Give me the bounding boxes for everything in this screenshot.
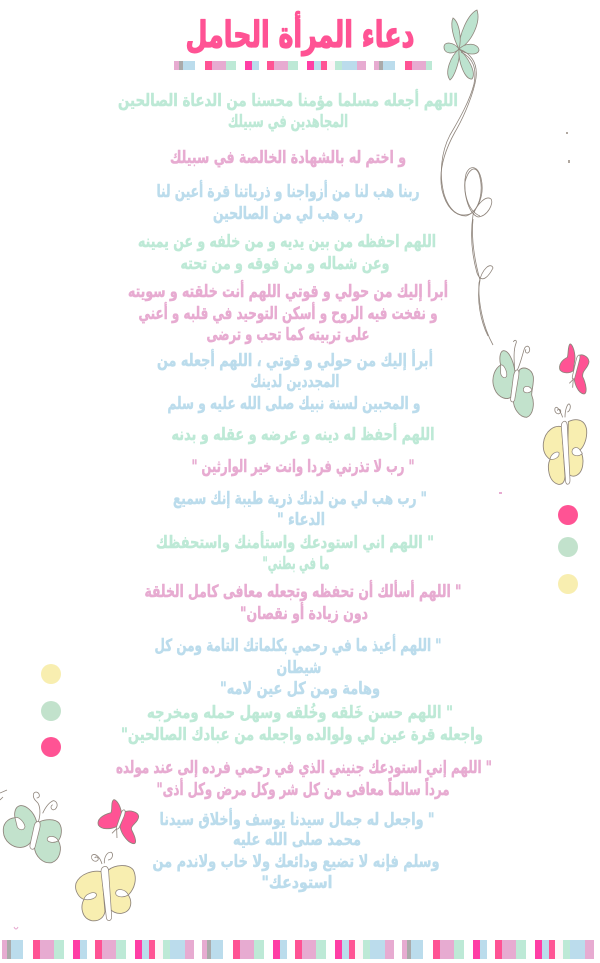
dot: left mint <box>41 701 61 721</box>
prayer text: block 3: ربنا هب لنا من أزواجنا و ذرياتنا قرة أعين لنا <box>156 180 420 202</box>
prayer text: block 9: الدعاء " <box>277 510 325 530</box>
prayer text: block 10 <box>156 531 434 574</box>
prayer text: block 3: رب هب لي من الصالحين <box>213 204 363 224</box>
prayer text: block 12: شيطان <box>276 658 322 678</box>
prayer text: block 11: دون زيادة أو نقصان" <box>240 602 368 624</box>
prayer text: block 13: واجعله قرة عين لي ولوالده واجعله من عبادك الصالحين" <box>121 725 483 745</box>
dot: right yellow <box>558 574 578 594</box>
butterfly: left yellow <box>76 852 135 921</box>
prayer text: block 11 <box>144 580 462 624</box>
prayer text: block 6 <box>157 349 433 414</box>
prayer text: block 2: و اختم له بالشهادة الخالصة في سبيلك <box>170 148 406 168</box>
prayer text: block 7: اللهم أحفظ له دينه و عرضه و عقله و بدنه <box>172 423 434 445</box>
dot: left pink <box>41 737 61 757</box>
prayer text: block 15 <box>152 808 440 893</box>
prayer text: block 9 <box>173 489 427 530</box>
prayer text: block 5: على تربيته كما تحب و ترضى <box>206 325 370 345</box>
prayer text: block 10: " اللهم اني استودعك واستأمنك واستحفظك <box>156 531 434 553</box>
prayer text: block 8: " رب لا تذرني فردا وانت خير الوارثين " <box>192 457 414 477</box>
prayer text: block 1: اللهم أجعله مسلما مؤمنا محسنا من الدعاة الصالحين <box>118 89 458 111</box>
prayer text: block 14: مرداً سالماً معافى من كل شر وكل مرض وكل أذى" <box>156 776 450 800</box>
prayer text: block 12: " اللهم أعيذ ما في رحمي بكلماتك التامة ومن كل <box>154 634 442 656</box>
dot: left yellow <box>41 664 61 684</box>
prayer text: block 4: وعن شماله و من فوقه و من تحته <box>180 254 390 274</box>
prayer text: block 15: محمد صلى الله عليه <box>233 830 361 850</box>
butterfly: left pink <box>98 800 139 844</box>
butterfly: right mint <box>493 340 533 417</box>
prayer text: block 6: أبرأ إليك من حولي و قوتي ، اللهم أجعله من <box>157 349 433 371</box>
prayer text: block 15: وسلم فإنه لا تضيع ودائعك ولا خاب ولاندم من <box>152 852 440 872</box>
prayer text: block 4: اللهم احفظه من بين يديه و من خلفه و عن يمينه <box>138 232 436 252</box>
prayer text: block 4 <box>138 232 436 274</box>
prayer text: block 5 <box>128 280 448 345</box>
prayer text: block 12: وهامة ومن كل عين لامه" <box>220 679 380 699</box>
prayer text: block 6: و المحبين لسنة نبيك صلى الله عليه و سلم <box>168 394 420 414</box>
butterfly: right pink <box>560 344 589 394</box>
prayer text: block 11: " اللهم أسألك أن تحفظه وتجعله معافى كامل الخلقة <box>144 580 462 602</box>
icon: flower petals <box>444 10 479 80</box>
butterfly: right yellow <box>543 404 587 484</box>
top striped divider <box>174 61 432 70</box>
prayer text: block 3 <box>156 180 420 224</box>
prayer text: block 15: " واجعل له جمال سيدنا يوسف وأخلاق سيدنا <box>160 808 434 830</box>
flower stem illustration <box>441 10 493 345</box>
prayer text: block 1 <box>118 89 458 132</box>
prayer text: block 10: ما في بطني" <box>262 554 330 574</box>
prayer text: block 13 <box>121 703 483 745</box>
prayer text: block 5: و نفخت فيه الروح و أسكن التوحيد في قلبه و أعني <box>138 302 438 324</box>
prayer text: block 1: المجاهدين في سبيلك <box>228 112 348 132</box>
bottom striped band <box>2 940 594 959</box>
prayer text: block 13: " اللهم حسن خَلقه وخُلقه وسهل حمله ومخرجه <box>147 703 453 723</box>
prayer text: block 15: استودعك" <box>262 873 332 893</box>
butterfly: left mint <box>3 792 61 863</box>
dot: right mint <box>558 537 578 557</box>
dot: right pink <box>558 505 578 525</box>
title: دعاء المرأة الحامل <box>186 11 414 56</box>
prayer text: block 6: المجددين لدينك <box>250 372 340 392</box>
prayer text: block 9: " رب هب لي من لدنك ذرية طيبة إنك سميع <box>173 489 427 509</box>
small specks <box>0 132 570 929</box>
prayer text: block 14 <box>116 758 492 800</box>
prayer text: block 5: أبرأ إليك من حولي و قوتي اللهم أنت خلقته و سويته <box>128 280 448 302</box>
prayer text: block 12 <box>154 634 442 699</box>
curling stem <box>441 49 493 345</box>
